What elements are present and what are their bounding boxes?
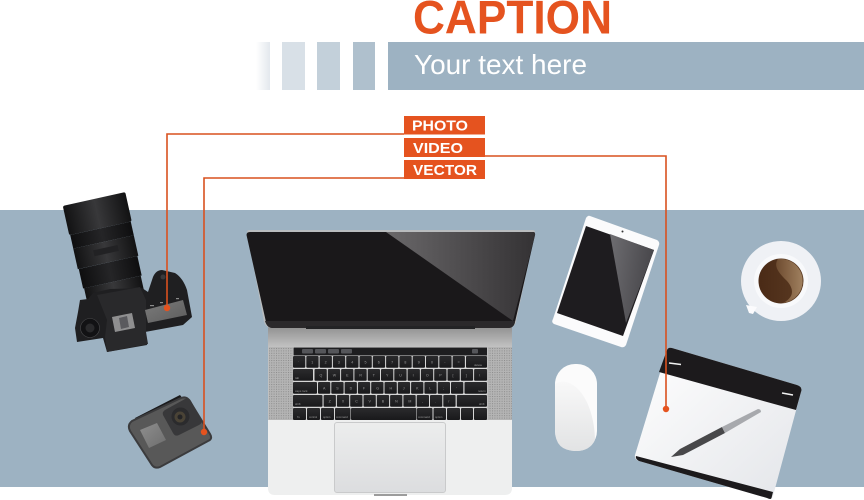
- camera body: [75, 270, 192, 352]
- key row 1: [293, 356, 487, 368]
- laptop: [246, 230, 535, 496]
- key row 5: fn: [297, 415, 300, 419]
- stylus pen: [671, 409, 761, 457]
- trackpad: [334, 422, 446, 492]
- key row 2: [293, 369, 487, 381]
- subtitle banner: Your text here: [414, 49, 587, 80]
- key row 3: caps lock: [295, 389, 308, 393]
- key row 5: [293, 408, 487, 420]
- desk background band: [0, 210, 864, 487]
- key row 4: shift: [295, 402, 301, 406]
- key row 1: delete: [474, 363, 483, 367]
- tablet indicator marks: [669, 363, 793, 395]
- key row 5: control: [309, 415, 317, 419]
- label: VECTOR: [404, 160, 485, 179]
- camera mode dial: [80, 318, 100, 338]
- key row 4: ZXCVBNM,./: [329, 400, 449, 404]
- camera hot shoe: [112, 313, 135, 332]
- key row 4: shift: [479, 402, 485, 406]
- laptop base: [268, 326, 512, 496]
- camera LCD screen: [145, 300, 187, 323]
- label: PHOTO: [404, 116, 485, 134]
- laptop screen: [246, 230, 535, 329]
- action camera lens: [163, 398, 202, 436]
- mouse: [555, 364, 597, 451]
- tablet screen glare: [610, 234, 654, 323]
- tablet top bar: [659, 348, 802, 410]
- touch bar: [294, 348, 487, 356]
- key row 3: ASDFGHJKL;': [323, 386, 457, 390]
- camera lens: [63, 192, 150, 316]
- action camera screen: [140, 423, 166, 448]
- label: VIDEO: VIDEO: [413, 140, 463, 157]
- subtitle banner: [388, 42, 864, 90]
- label: VECTOR: VECTOR: [413, 162, 477, 179]
- key row 5: option: [323, 415, 331, 419]
- tablet bottom bar: [636, 456, 773, 499]
- key row 2: tab: [295, 376, 300, 380]
- label: VIDEO: [404, 138, 485, 157]
- graphics tablet: [635, 348, 802, 499]
- tablet: [552, 216, 659, 347]
- action camera: [129, 395, 211, 468]
- label: PHOTO: PHOTO: [412, 118, 468, 134]
- coffee: [758, 258, 804, 304]
- connector line: VIDEO to graphics tablet: [485, 156, 669, 412]
- key row 2: QWERTYUIOP[]\: [320, 374, 480, 378]
- coffee cup: [741, 241, 821, 321]
- key row 5: option: [435, 415, 443, 419]
- key row 1: `1234567890-=: [298, 360, 460, 364]
- keyboard: [293, 347, 487, 420]
- camera buttons: [150, 274, 179, 306]
- key row 5: command: [336, 415, 348, 419]
- key row 5: command: [418, 415, 430, 419]
- key row 3: return: [478, 389, 486, 393]
- connector line: VECTOR to action camera: [201, 178, 404, 435]
- camera prism housing: [97, 287, 148, 352]
- DSLR camera: [63, 192, 192, 352]
- key row 4: [293, 395, 487, 407]
- key row 3: [293, 382, 487, 394]
- connector line: PHOTO to camera: [164, 134, 404, 311]
- decorative fading stripes: [256, 42, 375, 90]
